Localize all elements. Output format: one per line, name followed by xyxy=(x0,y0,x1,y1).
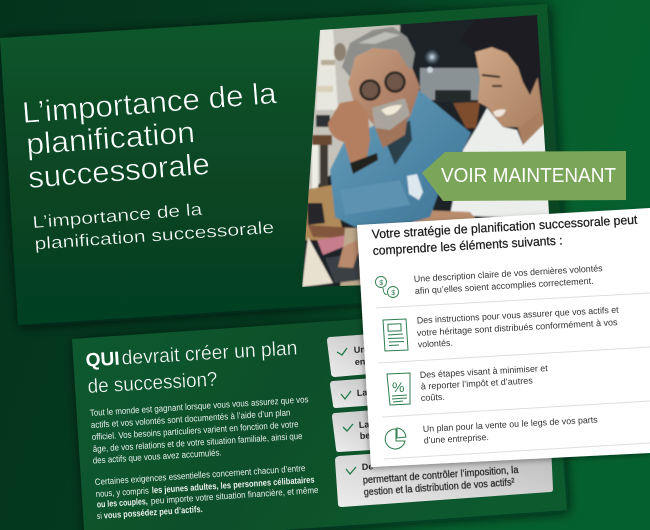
notebook xyxy=(316,234,345,256)
row 4 text xyxy=(423,415,598,445)
row 3 text: Des étapes visant à minimiser et xyxy=(420,363,548,380)
title xyxy=(21,77,278,195)
laptop screen xyxy=(302,237,333,287)
row 3 text: coûts. xyxy=(421,392,445,403)
body text: si xyxy=(96,511,102,521)
heading: who should create a plan: de succession? xyxy=(87,369,218,398)
row 2 text: votre héritage sont distribués conformément à vos xyxy=(417,317,618,338)
row 2 xyxy=(383,305,619,351)
title: successorale xyxy=(27,148,211,195)
button: voir maintenant: VOIR MAINTENANT xyxy=(441,165,616,187)
heading: who should create a plan: QUI xyxy=(85,349,120,371)
hand and arm xyxy=(328,100,370,168)
body text: vous possédez peu d’actifs. xyxy=(103,504,203,520)
row 3 text: à reporter l’impôt et d’autres xyxy=(421,375,533,391)
icon: percent document: % xyxy=(392,379,404,395)
glasses xyxy=(360,80,380,100)
young man shirt xyxy=(450,108,549,218)
row 3 xyxy=(387,363,548,405)
typing hand xyxy=(338,240,358,268)
panel: upper title card xyxy=(0,4,565,325)
panel: white strategy card xyxy=(357,208,650,467)
checklist item 1: Un xyxy=(354,344,366,355)
icon: dollar coins: $ xyxy=(379,280,383,287)
body text: Tout le monde est gagnant lorsque vous vous assurez que vos xyxy=(89,394,309,418)
older man face xyxy=(348,48,420,130)
row 1 xyxy=(376,263,603,298)
checklist boxes xyxy=(327,332,553,507)
subtitle xyxy=(32,200,275,253)
body text: ou les couples, xyxy=(96,496,148,509)
checklist item 4 xyxy=(335,442,553,507)
icon: percent document xyxy=(387,373,410,405)
checklist item 4: gestion et la distribution de vos actifs² xyxy=(363,477,515,498)
watch xyxy=(350,153,378,174)
body text: officiel. Vos besoins particuliers varient en fonction de votre xyxy=(91,419,299,442)
body text: actifs et vos volontés sont documentés à l’aide d’un plan xyxy=(90,407,291,430)
row 2 text xyxy=(417,305,619,349)
checklist item 4: De xyxy=(362,461,374,472)
body text: peu importe votre situation financière, et même xyxy=(150,485,319,506)
row 1 text: afin qu’elles soient accomplies correctement. xyxy=(415,276,594,296)
subtitle: L’importance de la xyxy=(32,200,203,232)
checklist item 3: be xyxy=(360,430,371,441)
row 2 text: Des instructions pour vous assurer que vos actifs et xyxy=(417,305,619,325)
icon: document xyxy=(383,319,408,351)
checklist item 2 xyxy=(330,376,403,408)
card heading: Votre stratégie de planification successorale peut xyxy=(371,213,638,241)
icon: pie chart xyxy=(385,428,406,449)
beard xyxy=(372,98,410,130)
checklist item 3 xyxy=(332,408,404,452)
older man neck xyxy=(373,118,408,148)
row 4 text: d’une entreprise. xyxy=(424,432,489,445)
older man shirt xyxy=(330,85,471,228)
checklist item 1 xyxy=(327,332,403,377)
body text: des actifs que vous avez accumulés. xyxy=(92,447,222,465)
icon: dollar coins xyxy=(376,276,398,298)
card heading xyxy=(371,213,638,258)
body text: nous, y compris xyxy=(95,485,149,499)
body text: âge, de vos relations et de votre situation familiale, ainsi que xyxy=(92,431,303,454)
icon: dollar coins: $ xyxy=(391,290,395,297)
camera xyxy=(307,203,325,225)
heading: who should create a plan: devrait créer un plan xyxy=(121,337,298,369)
button: voir maintenant xyxy=(422,151,626,201)
keyboard xyxy=(325,253,360,283)
row 2 text: volontés. xyxy=(418,338,453,349)
title: planification xyxy=(25,116,196,161)
young man hair xyxy=(475,46,539,94)
row 1 text: Une description claire de vos dernières volontés xyxy=(414,263,603,284)
title: L’importance de la xyxy=(21,77,278,130)
body text: les jeunes adultes, les personnes célibataires xyxy=(151,475,315,495)
card heading: comprendre les éléments suivants : xyxy=(372,233,563,258)
body text: Certaines exigences essentielles concernent chacun d’entre xyxy=(94,463,306,487)
young man face xyxy=(475,47,542,127)
checklist item 3: La xyxy=(359,419,371,430)
subtitle: planification successorale xyxy=(34,218,275,253)
older man hair xyxy=(342,27,415,77)
row 1 text xyxy=(414,263,603,296)
photo: two men looking at a laptop xyxy=(302,15,549,287)
row 4 xyxy=(385,415,598,449)
checklist item 2: La xyxy=(357,387,369,398)
leather strap xyxy=(308,225,353,238)
body text xyxy=(89,394,319,521)
panel: lower who should plan xyxy=(72,306,567,530)
row 3 text xyxy=(420,363,548,403)
checklist item 1: en xyxy=(355,356,366,367)
heading: who should create a plan xyxy=(85,337,298,398)
checklist item 4: permettant de contrôler l’imposition, la xyxy=(362,465,519,486)
row 4 text: Un plan pour la vente ou le legs de vos parts xyxy=(423,415,598,434)
young man neck xyxy=(517,110,545,145)
